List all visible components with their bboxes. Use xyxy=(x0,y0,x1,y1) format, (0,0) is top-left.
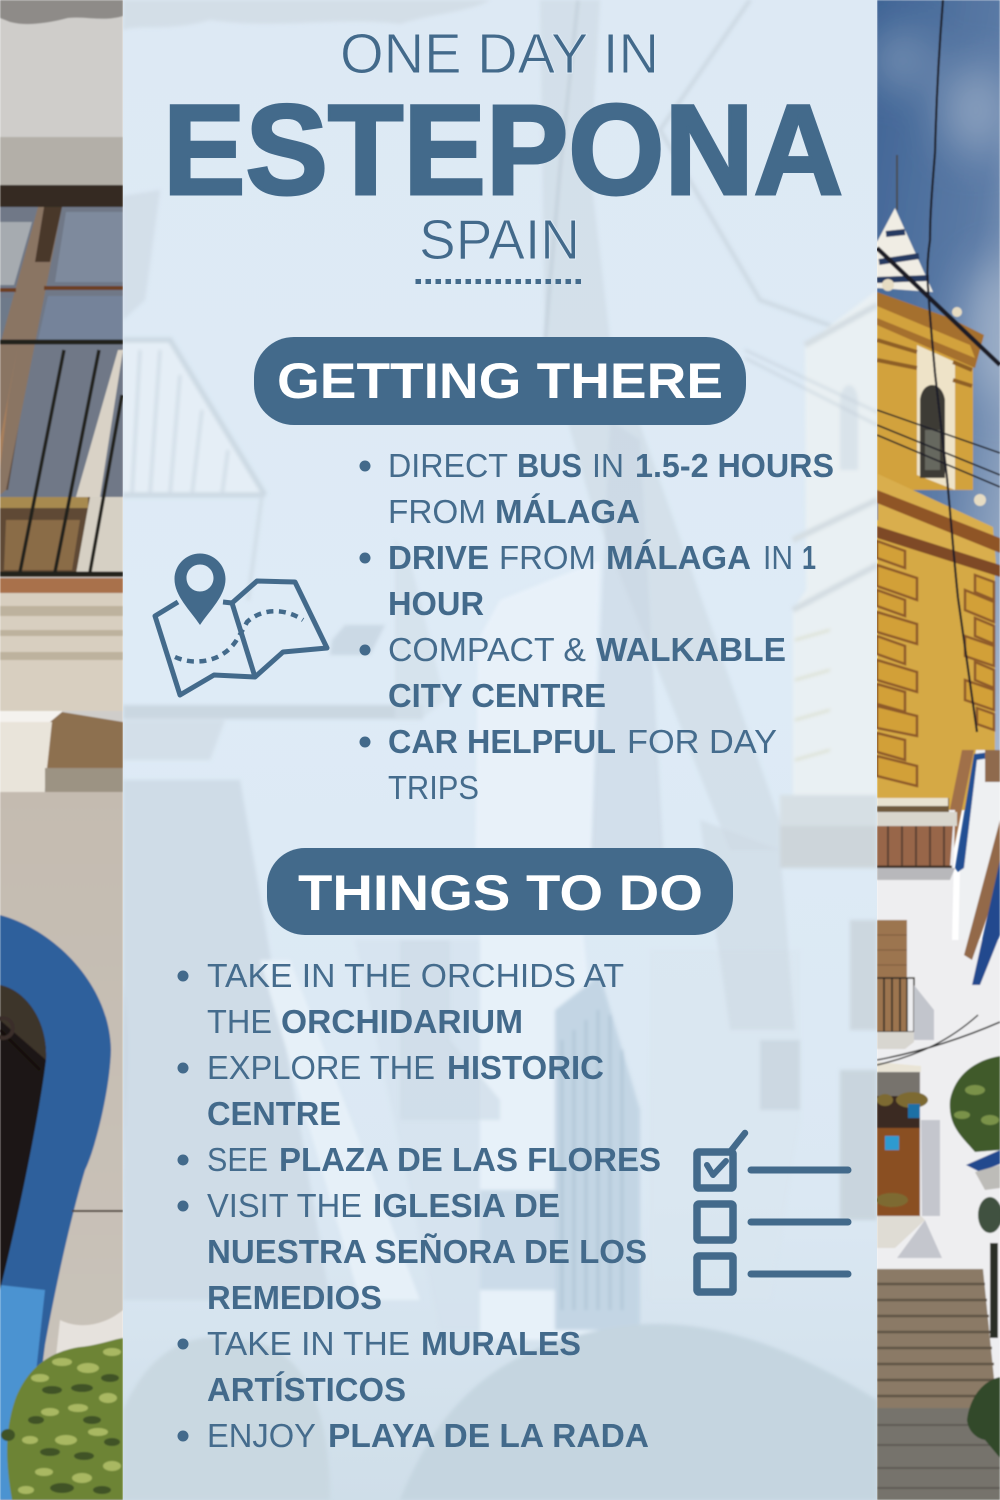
list: things to do bullets: ORCHIDARIUM xyxy=(281,1003,523,1040)
list: getting there bullets: FROM xyxy=(499,539,596,576)
list: getting there bullets: MÁLAGA xyxy=(606,539,751,576)
list: getting there bullets: CAR HELPFUL xyxy=(388,723,616,760)
photo background: right church tower and white houses xyxy=(875,0,1000,1500)
list: getting there bullets: 1.5-2 HOURS xyxy=(635,447,834,484)
list: getting there bullets: DRIVE xyxy=(388,539,489,576)
title: Spain: SPAIN xyxy=(419,208,580,272)
list: things to do bullets: SEE xyxy=(207,1141,268,1178)
list: things to do bullets: PLAYA DE LA RADA xyxy=(328,1417,649,1454)
translucent text panel with faded photo xyxy=(123,0,877,1500)
list: getting there bullets: WALKABLE xyxy=(596,631,786,668)
list: getting there bullets: IN xyxy=(592,447,624,484)
list: getting there bullets: HOUR xyxy=(388,585,484,622)
list: things to do bullets: MURALES xyxy=(421,1325,581,1362)
heading: getting there: GETTING THERE xyxy=(277,353,723,409)
list: getting there bullets: DIRECT xyxy=(388,447,508,484)
list: things to do bullets: TAKE IN THE xyxy=(207,1325,410,1362)
list: things to do bullets: VISIT THE xyxy=(207,1187,362,1224)
list: getting there bullets: IN xyxy=(763,539,793,576)
dotted divider xyxy=(416,279,581,284)
icon: map with location pin xyxy=(155,554,327,695)
list: things to do bullets: ARTÍSTICOS xyxy=(207,1371,406,1408)
heading: things to do: THINGS TO DO xyxy=(298,865,703,921)
title: one day in: ONE DAY IN xyxy=(340,22,659,86)
list: things to do bullets: ENJOY xyxy=(207,1417,316,1454)
list: getting there bullets: COMPACT & xyxy=(388,631,586,668)
list: things to do bullets: HISTORIC xyxy=(447,1049,604,1086)
list: things to do bullets xyxy=(178,957,661,1454)
list: getting there bullets: TRIPS xyxy=(388,769,479,806)
list: getting there bullets: FOR DAY xyxy=(627,723,777,760)
list: getting there bullets xyxy=(360,447,834,806)
list: things to do bullets: EXPLORE THE xyxy=(207,1049,435,1086)
list: things to do bullets: THE xyxy=(207,1003,272,1040)
title: Estepona: ESTEPONA xyxy=(163,79,843,222)
list: things to do bullets: REMEDIOS xyxy=(207,1279,382,1316)
list: getting there bullets: 1 xyxy=(802,539,816,576)
list: getting there bullets: CITY CENTRE xyxy=(388,677,606,714)
list: getting there bullets: BUS xyxy=(517,447,582,484)
list: things to do bullets: CENTRE xyxy=(207,1095,341,1132)
list: getting there bullets: FROM xyxy=(388,493,486,530)
list: things to do bullets: IGLESIA DE xyxy=(373,1187,560,1224)
list: things to do bullets: PLAZA DE LAS FLORES xyxy=(279,1141,661,1178)
list: things to do bullets: NUESTRA SEÑORA DE LOS xyxy=(207,1233,647,1270)
heading: getting there xyxy=(254,337,746,425)
list: getting there bullets: MÁLAGA xyxy=(495,493,640,530)
heading: things to do xyxy=(267,848,733,935)
list: things to do bullets: TAKE IN THE ORCHIDS AT xyxy=(207,957,624,994)
photo background: left building with window and blue arch xyxy=(0,0,123,1500)
icon: checklist xyxy=(697,1133,848,1292)
